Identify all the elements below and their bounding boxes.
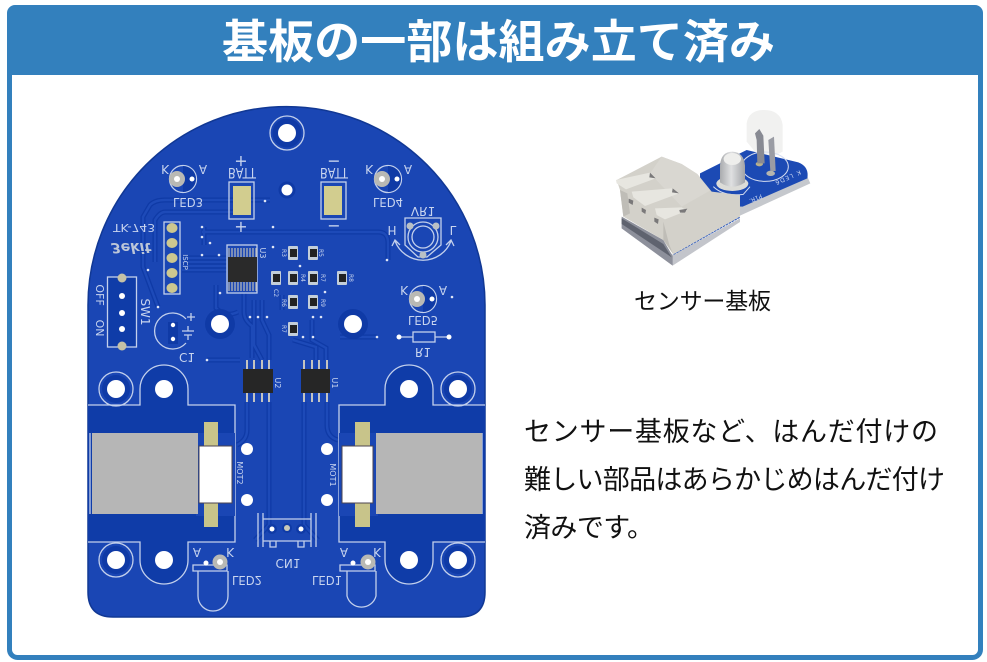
board silkscreen labels: ISCP [181, 254, 189, 270]
board silkscreen labels: R4 [299, 274, 306, 282]
board silkscreen labels: A [199, 162, 208, 176]
board silkscreen labels: BATT [228, 164, 256, 180]
board silkscreen labels: L [450, 223, 457, 237]
sensor board with LED: P1R. [748, 192, 763, 204]
left motor [92, 422, 232, 527]
board silkscreen labels: VR1 [411, 204, 435, 218]
sensor board with LED [700, 110, 810, 216]
board silkscreen labels: U3 [258, 248, 267, 258]
description text: 難しい部品はあらかじめはんだ付け [524, 465, 945, 495]
copper traces [143, 200, 388, 540]
board silkscreen labels: A [193, 545, 202, 559]
IC U3 [227, 245, 257, 293]
board silkscreen labels: K [400, 283, 409, 297]
trimmer VR1 [392, 218, 454, 260]
board silkscreen labels: LED2 [232, 573, 262, 587]
board silkscreen labels: OFF [93, 284, 106, 306]
sensor board caption: センサー基板 [634, 288, 771, 314]
board silkscreen labels: − [327, 152, 341, 171]
IC U2 [243, 360, 273, 402]
board silkscreen labels [93, 152, 457, 587]
resistor R1 [396, 332, 452, 342]
right motor [342, 422, 482, 527]
board silkscreen labels: LED3 [173, 195, 203, 209]
board silkscreen labels: R3 [280, 249, 287, 257]
board silkscreen labels: SW1 [138, 298, 152, 326]
board silkscreen labels: R7 [280, 325, 287, 333]
board silkscreen labels: R8 [347, 274, 354, 282]
sensor board with LED: K LED6 [774, 168, 802, 186]
board silkscreen labels: ON [93, 320, 106, 336]
description text: 済みです。 [524, 513, 654, 543]
board silkscreen labels: K [365, 162, 374, 176]
LED4 footprint [374, 166, 402, 192]
white connector [616, 157, 740, 266]
board silkscreen labels: R9 [319, 299, 326, 307]
LED1 footprint [340, 554, 376, 607]
board silkscreen labels: R7 [319, 274, 326, 282]
board silkscreen labels: U2 [273, 378, 282, 388]
board silkscreen labels: LED5 [408, 313, 438, 327]
board silkscreen labels: BATT [320, 164, 348, 180]
board silkscreen labels: MOT2 [235, 461, 244, 485]
sensor board illustration [616, 110, 810, 266]
board outline [88, 107, 485, 617]
board silkscreen labels: CN1 [276, 556, 300, 570]
board silkscreen labels: − [327, 216, 341, 235]
board silkscreen labels: MOT1 [328, 463, 337, 487]
title: 基板の一部は組み立て済み [222, 16, 775, 68]
board silkscreen labels: LED4 [373, 195, 403, 209]
LED2 footprint [193, 554, 228, 611]
switch SW1 [108, 274, 136, 350]
mounting holes [99, 116, 475, 577]
LED5 footprint [409, 286, 436, 312]
description text: センサー基板など、はんだ付けの [524, 417, 938, 447]
board silkscreen labels: K [226, 545, 235, 559]
circuit board [88, 107, 485, 617]
connector CN1 [258, 513, 316, 547]
board silkscreen labels: R5 [317, 249, 324, 257]
via dots [147, 200, 453, 361]
board silkscreen labels: A [340, 545, 349, 559]
board silkscreen labels: K [161, 162, 170, 176]
board silkscreen labels: A [404, 162, 413, 176]
board silkscreen labels: 3ekit [111, 239, 152, 255]
board silkscreen labels: R6 [280, 299, 287, 307]
battery pads [229, 182, 346, 219]
board silkscreen labels: + [234, 152, 248, 171]
board silkscreen labels: C2 [272, 289, 279, 297]
description text [524, 417, 945, 543]
board silkscreen labels: A [439, 283, 448, 297]
capacitor C1 [155, 313, 195, 349]
board silkscreen labels: U1 [330, 378, 339, 388]
chip resistors [271, 246, 347, 336]
IC U1 [301, 360, 330, 402]
motor mount bands [88, 365, 485, 584]
board silkscreen labels: C1 [179, 350, 195, 364]
board silkscreen labels: LED1 [312, 573, 342, 587]
board silkscreen labels: TK-743 [112, 221, 155, 233]
LED3 footprint [169, 166, 196, 192]
board silkscreen labels: + [234, 217, 248, 236]
board silkscreen labels: R1 [415, 345, 431, 359]
board silkscreen labels: H [387, 223, 397, 237]
ISCP header [164, 222, 180, 294]
board silkscreen labels: K [373, 545, 382, 559]
